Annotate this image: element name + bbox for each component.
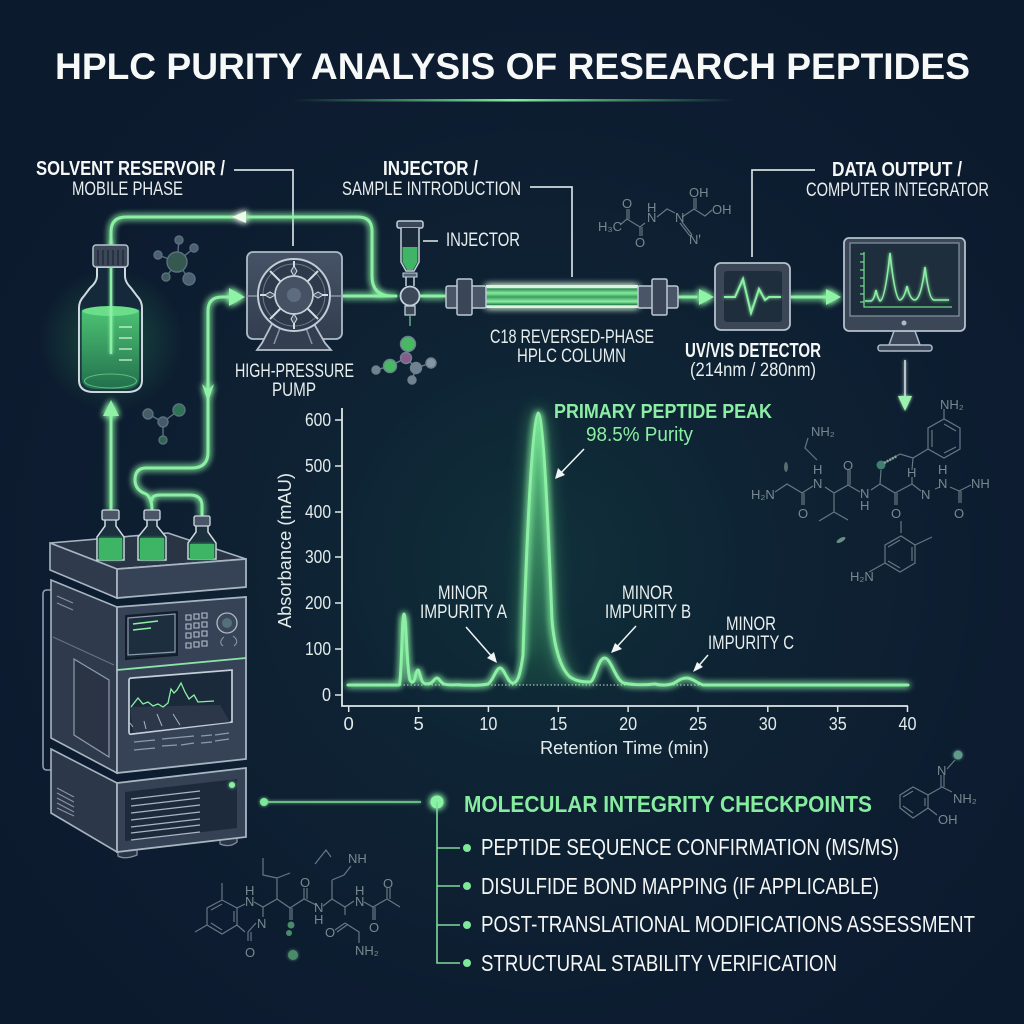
chemical structure: bottom left: H xyxy=(314,912,323,927)
label: injector xyxy=(342,157,521,200)
chemical structure: right: H xyxy=(938,462,947,477)
checkpoint tree xyxy=(430,796,471,967)
x-axis tick labels: 0 xyxy=(344,713,354,734)
annotation: minor impurity C xyxy=(693,614,794,672)
chemical structure: right: NH₂ xyxy=(940,397,964,412)
chemical structure: right: N xyxy=(860,486,869,501)
y-axis tick labels: 600 xyxy=(305,409,331,430)
chemical structure: right: H₂N xyxy=(850,569,874,584)
chromatogram trace xyxy=(348,413,908,685)
leader line: injector to column xyxy=(530,187,572,277)
label: column xyxy=(490,327,654,367)
label: injector tag: INJECTOR xyxy=(446,230,520,251)
x-axis tick labels xyxy=(344,713,916,734)
label: column: HPLC COLUMN xyxy=(517,346,626,367)
chemical structure: top: N xyxy=(675,210,684,225)
chemical structure: bottom left: NH xyxy=(348,851,367,866)
chemical structure: top: H₃C xyxy=(598,219,622,234)
label: high-pressure pump: HIGH-PRESSURE xyxy=(235,361,354,382)
label: solvent reservoir: SOLVENT RESERVOIR / xyxy=(36,157,225,180)
chemical structure: bottom left: N xyxy=(355,894,364,909)
chemical structure: bottom left: NH₂ xyxy=(355,943,379,958)
x-axis tick labels: 10 xyxy=(479,713,497,734)
label: solvent reservoir xyxy=(36,157,225,200)
label: detector: UV/VIS DETECTOR xyxy=(685,339,821,362)
chemical structure: right xyxy=(751,397,990,584)
chemical structure: top: OH xyxy=(689,185,708,200)
chemical structure: bottom left: N xyxy=(245,894,254,909)
panel: molecular integrity checkpoints xyxy=(430,791,975,976)
label: solvent reservoir: MOBILE PHASE xyxy=(72,179,183,200)
annotation: minor impurity C: MINOR xyxy=(726,614,776,635)
chemical structure: right: H xyxy=(860,498,869,513)
chemical structure: bottom left: N xyxy=(314,900,323,915)
y-axis tick labels: 100 xyxy=(305,638,331,659)
checkpoint item 2: DISULFIDE BOND MAPPING (IF APPLICABLE) xyxy=(481,873,879,899)
leader line: detector to data output xyxy=(752,170,815,257)
x-axis tick labels: 35 xyxy=(829,713,847,734)
chemical structure: bottom left: H xyxy=(245,883,254,898)
chemical structure: top: O xyxy=(635,235,645,250)
chemical structure: top right of checkpoints: OH xyxy=(938,812,958,827)
checkpoint item 1: PEPTIDE SEQUENCE CONFIRMATION (MS/MS) xyxy=(481,834,899,860)
label: data output: DATA OUTPUT / xyxy=(832,158,962,181)
y-axis tick labels: 0 xyxy=(322,684,331,705)
chemical structure: right: O xyxy=(798,506,808,521)
x-axis tick labels: 25 xyxy=(689,713,707,734)
annotation: primary peptide peak: PRIMARY PEPTIDE PEAK xyxy=(554,400,772,423)
y-axis tick labels: 300 xyxy=(305,546,331,567)
arrow: monitor to structure xyxy=(898,360,912,411)
icon: molecule 2 xyxy=(143,404,185,444)
chemical structure: right: H xyxy=(907,465,916,480)
chemical structure: bottom left: O xyxy=(300,875,310,890)
annotation: minor impurity A: MINOR xyxy=(438,583,488,604)
chemical structure: bottom left: N xyxy=(257,916,266,931)
leader line: solvent reservoir to pump xyxy=(234,170,293,246)
checkpoints heading: MOLECULAR INTEGRITY CHECKPOINTS xyxy=(464,791,872,817)
icon: injector xyxy=(397,221,423,326)
middle module xyxy=(51,580,246,773)
chemical structure: top: H xyxy=(647,200,656,215)
chemical structure: top: Nꞌ xyxy=(689,232,701,247)
label: injector: SAMPLE INTRODUCTION xyxy=(342,179,521,200)
connector: instrument to checkpoints xyxy=(260,798,421,806)
y-axis tick labels: 500 xyxy=(305,455,331,476)
x-axis tick labels: 15 xyxy=(549,713,567,734)
x-axis tick labels: 40 xyxy=(898,713,916,734)
icon: HPLC instrument stack xyxy=(43,510,246,858)
chemical structure: right: O xyxy=(891,506,901,521)
chemical structure: top right of checkpoints xyxy=(900,750,977,827)
title: HPLC PURITY ANALYSIS OF RESEARCH PEPTIDES xyxy=(55,45,970,87)
chemical structure: bottom left: O xyxy=(245,945,255,960)
annotation: minor impurity C: IMPURITY C xyxy=(708,633,794,654)
solvent vial 1 xyxy=(97,510,124,560)
label: detector: (214nm / 280nm) xyxy=(690,360,816,381)
label: high-pressure pump: PUMP xyxy=(272,380,316,401)
annotation: minor impurity B xyxy=(605,583,691,653)
label: high-pressure pump xyxy=(235,361,354,401)
y-axis tick labels: 200 xyxy=(305,592,331,613)
x-axis tick labels: 5 xyxy=(413,713,424,734)
chemical structure: right: N xyxy=(938,476,947,491)
chemical structure: top right of checkpoints: NH₂ xyxy=(953,791,977,806)
annotation: minor impurity B: IMPURITY B xyxy=(605,602,691,623)
label: injector: INJECTOR / xyxy=(383,157,478,180)
chemical structure: top xyxy=(598,185,732,250)
label: column: C18 REVERSED-PHASE xyxy=(490,327,654,348)
icon: computer monitor xyxy=(844,238,965,351)
chemical structure: top: O xyxy=(622,196,632,211)
x-axis tick labels: 30 xyxy=(759,713,777,734)
chemical structure: right: N xyxy=(921,487,930,502)
main peak halo xyxy=(523,413,570,677)
icon: solvent bottle xyxy=(39,240,183,412)
icon: molecule 1 xyxy=(154,236,198,285)
x-axis tick labels: 20 xyxy=(619,713,637,734)
y-axis tick labels: 400 xyxy=(305,501,331,522)
chemical structure: top: OH xyxy=(712,202,732,217)
icon: high-pressure pump xyxy=(247,252,342,350)
y-axis tick labels xyxy=(305,409,331,705)
chemical structure: right: NH₂ xyxy=(811,424,835,439)
chemical structure: right: H₂N xyxy=(751,487,775,502)
chemical structure: right: H xyxy=(813,462,822,477)
chemical structure: bottom left: H xyxy=(355,883,364,898)
annotation: minor impurity A: IMPURITY A xyxy=(420,602,507,623)
x-axis title: Retention Time (min) xyxy=(540,737,709,758)
solvent vial 2 xyxy=(138,510,166,560)
chemical structure: bottom left: O xyxy=(325,925,335,940)
solvent tray xyxy=(50,533,246,598)
baseline xyxy=(400,684,700,686)
chemical structure: right: NH xyxy=(971,476,990,491)
chemical structure: bottom left: O xyxy=(369,920,379,935)
main peak fill xyxy=(512,413,590,685)
icon: molecule 3 xyxy=(372,336,436,384)
flow lines xyxy=(103,211,841,516)
label: injector tag xyxy=(423,230,520,251)
chemical structure: bottom left: O xyxy=(383,876,393,891)
chemical structure: right: O xyxy=(954,506,964,521)
solvent vial 3 xyxy=(188,516,216,559)
y-axis title: Absorbance (mAU) xyxy=(274,473,295,628)
chromatogram chart xyxy=(274,408,916,758)
annotation: minor impurity B: MINOR xyxy=(622,583,673,604)
checkpoint item 4: STRUCTURAL STABILITY VERIFICATION xyxy=(481,950,837,976)
annotation: primary peptide peak xyxy=(554,400,772,479)
chemical structure: right: N xyxy=(813,476,822,491)
bottom module xyxy=(51,749,246,858)
chemical structure: bottom left xyxy=(195,850,400,960)
icon: UV/VIS detector xyxy=(715,263,790,330)
chemical structure: top right of checkpoints: N xyxy=(937,763,946,778)
icon: C18 column xyxy=(446,279,678,315)
chemical structure: right: O xyxy=(843,458,853,473)
annotation: primary peptide peak: 98.5% Purity xyxy=(586,424,693,446)
label: data output xyxy=(806,158,989,201)
chart axes xyxy=(335,408,908,712)
label: detector xyxy=(685,339,821,381)
annotation: minor impurity A xyxy=(420,583,507,663)
handle xyxy=(43,590,51,770)
chemical structure: top: N xyxy=(647,210,656,225)
